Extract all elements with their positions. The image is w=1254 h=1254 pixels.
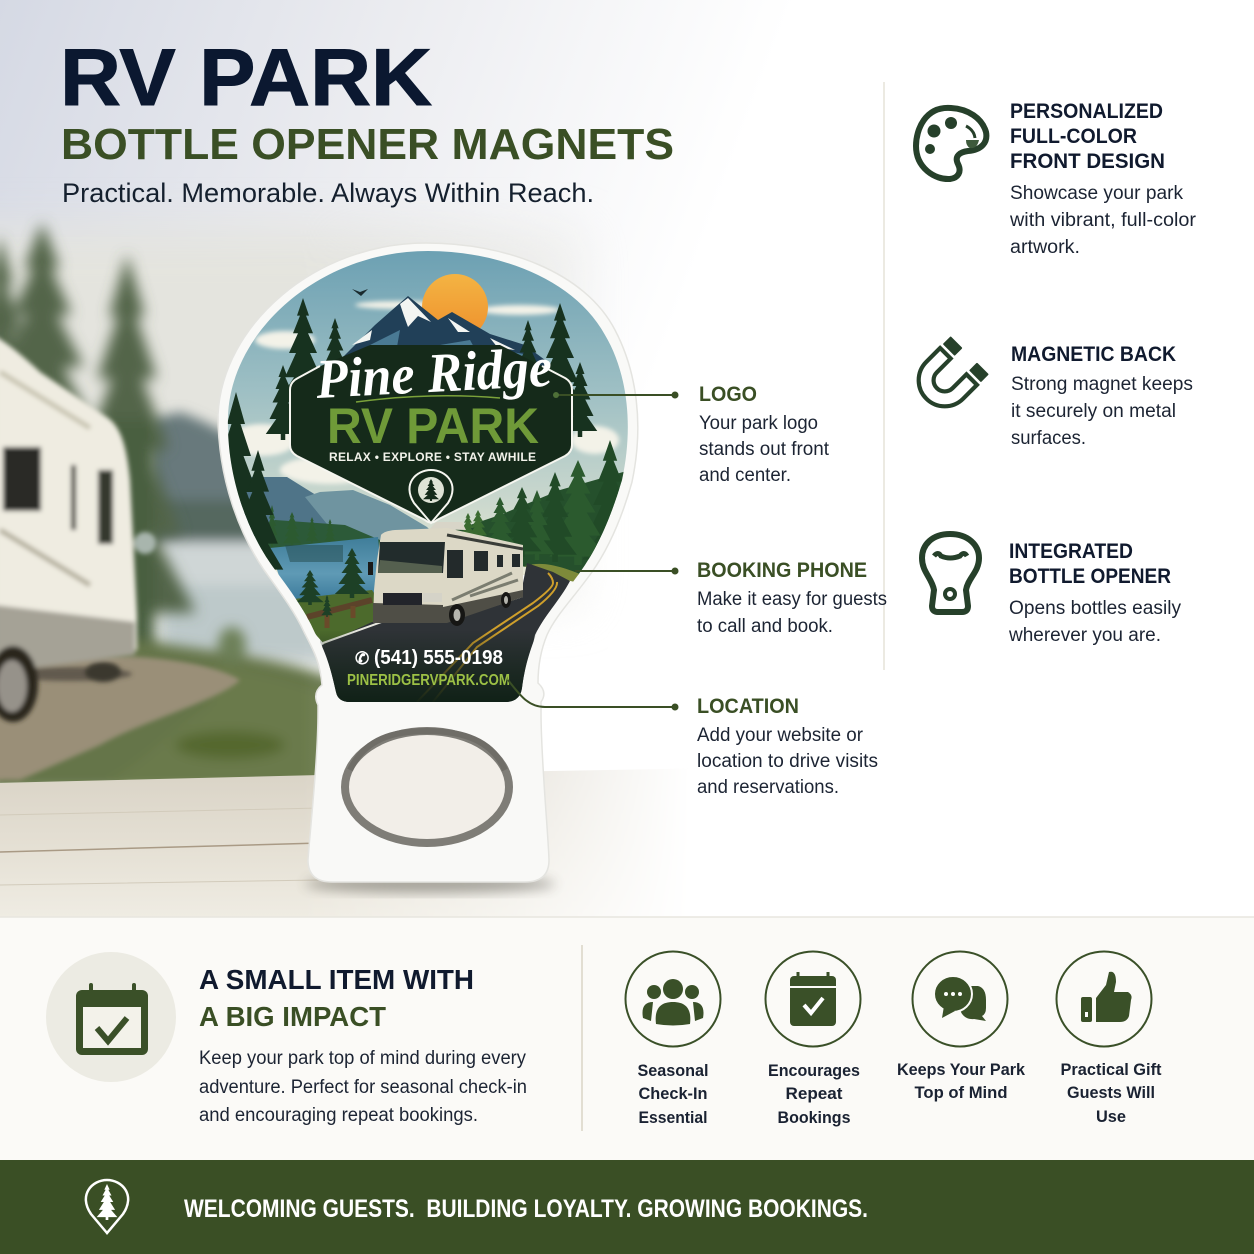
footer banner bbox=[0, 1160, 1254, 1254]
callout: logo: LOGO bbox=[699, 383, 757, 406]
clouds bbox=[228, 301, 619, 484]
callout: logo: and center. bbox=[699, 465, 791, 486]
feature: magnetic back bbox=[907, 336, 1193, 449]
right forest bbox=[455, 472, 624, 575]
blurred shore and bushes bbox=[0, 627, 345, 790]
feature: personalized front design bbox=[916, 100, 1197, 258]
benefit: practical gift: Use bbox=[1096, 1107, 1126, 1126]
feature: magnetic back: it securely on metal bbox=[1011, 401, 1176, 422]
script name: Pine Ridge bbox=[314, 337, 553, 411]
background photo scene bbox=[0, 0, 641, 916]
description: Keep your park top of mind during every bbox=[199, 1048, 526, 1069]
product: bottle opener magnet bbox=[202, 243, 640, 893]
feature: personalized front design: PERSONALIZED bbox=[1010, 100, 1163, 123]
icon: thumbs up bbox=[1056, 952, 1152, 1046]
tagline: Practical. Memorable. Always Within Reach. bbox=[62, 178, 594, 208]
icon: calendar check bbox=[766, 952, 860, 1046]
feature: magnetic back: Strong magnet keeps bbox=[1011, 374, 1193, 395]
badge panel bbox=[290, 345, 572, 522]
panel: big impact: and encouraging repeat bookings. bbox=[199, 1105, 478, 1126]
feature: personalized front design: Showcase your park bbox=[1010, 183, 1183, 204]
heading: A SMALL ITEM WITH bbox=[199, 964, 474, 995]
benefit: repeat bookings bbox=[766, 952, 860, 1127]
icon: calendar badge bbox=[46, 952, 176, 1082]
blurred pine trees bbox=[0, 222, 196, 660]
wooden table bbox=[0, 770, 641, 916]
blurred gravel road bbox=[0, 650, 240, 780]
blurred motorhome bbox=[0, 336, 156, 722]
slogan: RELAX • EXPLORE • STAY AWHILE bbox=[329, 450, 536, 464]
icon: palette bbox=[916, 108, 986, 179]
website: PINERIDGERVPARK.COM bbox=[347, 672, 510, 689]
sun bbox=[422, 274, 488, 328]
snow mountains bbox=[344, 296, 545, 366]
feature: integrated bottle opener bbox=[922, 534, 1182, 646]
icon: speech bubbles bbox=[912, 952, 1008, 1046]
callout: logo: stands out front bbox=[699, 439, 830, 460]
icon: people bbox=[626, 952, 720, 1046]
icon: horseshoe magnet bbox=[907, 336, 989, 418]
feature: magnetic back: surfaces. bbox=[1011, 428, 1086, 449]
guardrail bbox=[307, 600, 372, 617]
benefit: repeat bookings: Repeat bbox=[786, 1084, 843, 1103]
icon: tree location pin bbox=[86, 1180, 128, 1233]
subtitle: BOTTLE OPENER MAGNETS bbox=[61, 120, 674, 169]
feature: personalized front design: artwork. bbox=[1010, 237, 1080, 258]
feature: magnetic back: MAGNETIC BACK bbox=[1011, 343, 1176, 366]
callout: booking phone bbox=[575, 559, 887, 637]
feature: integrated bottle opener: INTEGRATED bbox=[1009, 540, 1133, 563]
distant mountains bbox=[240, 477, 327, 540]
benefit: repeat bookings: Encourages bbox=[768, 1061, 860, 1080]
feature: integrated bottle opener: Opens bottles easily bbox=[1009, 598, 1182, 619]
bird bbox=[352, 289, 368, 296]
feature: personalized front design: with vibrant, full-color bbox=[1009, 210, 1197, 231]
RV PARK name: RV PARK bbox=[327, 398, 539, 454]
benefit: practical gift: Guests Will bbox=[1067, 1083, 1155, 1102]
benefit: practical gift bbox=[1056, 952, 1162, 1126]
left treeline bbox=[252, 520, 380, 558]
benefit: seasonal check-in: Seasonal bbox=[638, 1061, 708, 1080]
icon: bottle opener bbox=[922, 534, 979, 612]
phone number: ✆ bbox=[355, 649, 369, 668]
motorhome bbox=[368, 522, 523, 626]
large pines bbox=[202, 298, 597, 592]
feature: personalized front design: FRONT DESIGN bbox=[1010, 150, 1165, 173]
benefit: top of mind bbox=[897, 952, 1026, 1102]
benefit: top of mind: Top of Mind bbox=[914, 1083, 1008, 1102]
callout: location: Add your website or bbox=[697, 725, 864, 746]
feature: personalized front design: FULL-COLOR bbox=[1010, 125, 1137, 148]
phone number: (541) 555-0198 bbox=[374, 647, 503, 669]
lake bbox=[270, 537, 385, 610]
blurred distant mountains and lake bbox=[148, 404, 319, 671]
benefit: repeat bookings: Bookings bbox=[778, 1108, 850, 1127]
location pin bbox=[409, 470, 453, 523]
benefit: seasonal check-in: Essential bbox=[638, 1108, 708, 1127]
callout: booking phone: Make it easy for guests bbox=[697, 589, 887, 610]
feature: integrated bottle opener: wherever you are. bbox=[1008, 625, 1161, 646]
panel: big impact: A BIG IMPACT bbox=[199, 1001, 386, 1032]
callout: logo bbox=[553, 383, 830, 486]
bottle opening bbox=[345, 731, 509, 843]
callout: booking phone: to call and book. bbox=[697, 616, 833, 637]
dark contact band bbox=[320, 632, 536, 702]
benefit: seasonal check-in: Check-In bbox=[638, 1084, 708, 1103]
callout: location: and reservations. bbox=[697, 777, 839, 798]
feature: integrated bottle opener: BOTTLE OPENER bbox=[1009, 565, 1171, 588]
printed artwork bbox=[228, 251, 628, 702]
callout: location: LOCATION bbox=[697, 695, 799, 718]
panel: big impact bbox=[0, 917, 1254, 1160]
foreground pines bbox=[296, 548, 369, 617]
benefit: practical gift: Practical Gift bbox=[1060, 1060, 1162, 1079]
footer slogan: WELCOMING GUESTS. BUILDING LOYALTY. GROWING BOOKINGS. bbox=[184, 1195, 868, 1223]
callout: logo: Your park logo bbox=[699, 413, 818, 434]
benefit: top of mind: Keeps Your Park bbox=[897, 1060, 1026, 1079]
panel: big impact: adventure. Perfect for seasonal check-in bbox=[199, 1077, 527, 1098]
callout: location: location to drive visits bbox=[697, 751, 878, 772]
title: RV PARK bbox=[60, 33, 432, 123]
benefit: seasonal check-in bbox=[626, 952, 720, 1127]
grass bank bbox=[296, 590, 374, 644]
road bbox=[322, 563, 570, 703]
callout: location bbox=[508, 680, 878, 798]
callout: booking phone: BOOKING PHONE bbox=[697, 559, 867, 582]
